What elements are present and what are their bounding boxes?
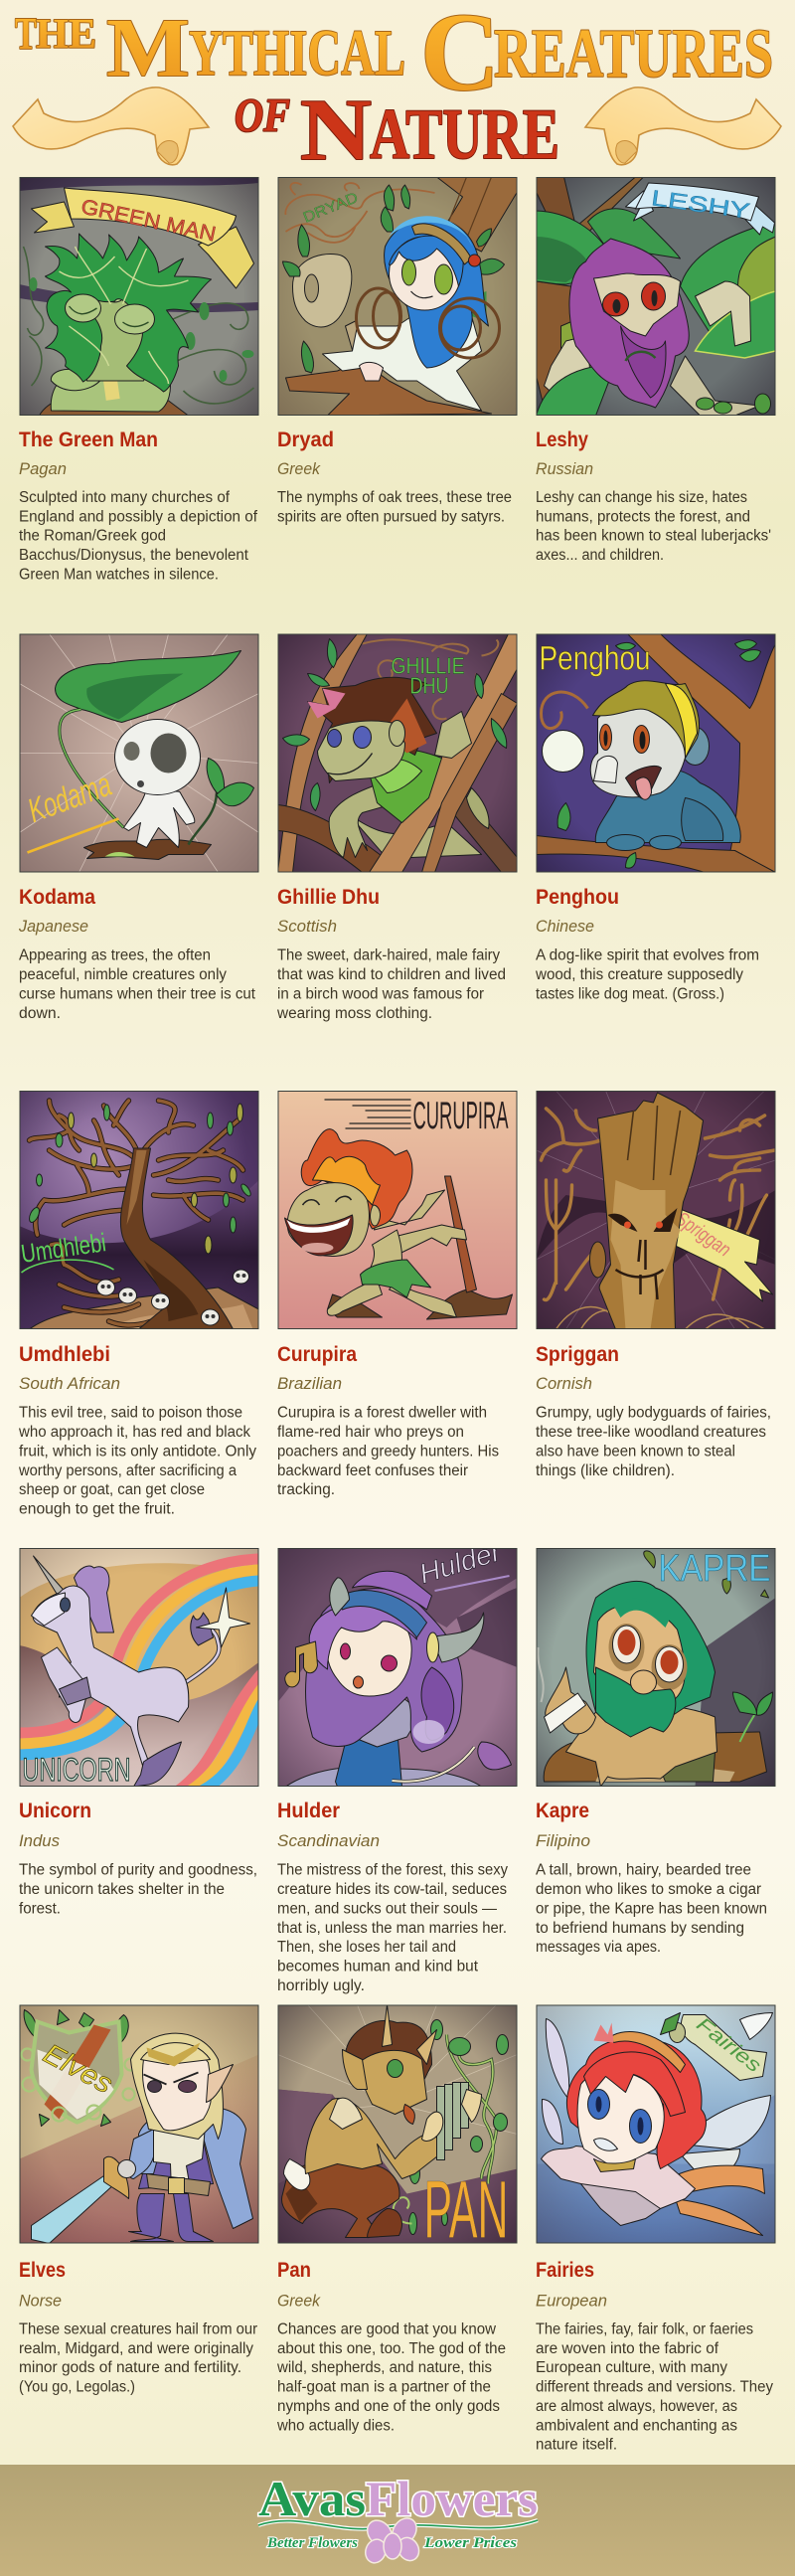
illustration: Hulder: Hulder: [415, 1535, 506, 1590]
description: are almost always, however, as: [536, 2398, 737, 2415]
description: who approach it, has red and black: [18, 1424, 250, 1441]
name: Unicorn: [19, 1800, 91, 1822]
card: Dryad: [277, 177, 517, 525]
illustration: Elves: [20, 2004, 258, 2243]
footer logo: Avas Flowers: Lower Prices: [423, 2535, 517, 2551]
origin: South African: [19, 1374, 120, 1393]
description: has been known to steal luberjacks': [536, 528, 771, 545]
description: backward feet confuses their: [277, 1462, 468, 1479]
description: flame-red hair who preys on: [277, 1424, 464, 1441]
description: England and possibly a depiction of: [19, 508, 258, 525]
origin: Cornish: [536, 1374, 592, 1393]
description: the Roman/Greek god: [19, 528, 166, 545]
origin: European: [536, 2292, 607, 2311]
illustration: Umdhlebi: Umdhlebi: [19, 1227, 107, 1269]
description: nature itself.: [536, 2437, 617, 2454]
description: worthy persons, after sacrificing a: [18, 1462, 237, 1479]
description: horribly ugly.: [277, 1977, 365, 1994]
footer logo: Avas Flowers: [258, 2471, 538, 2566]
footer logo: Avas Flowers: Better Flowers: [266, 2535, 358, 2551]
illustration: Elves: Elves: [39, 2037, 118, 2100]
footer band: [0, 2465, 795, 2576]
illustration: Unicorn: UNICORN: [22, 1752, 131, 1788]
illustration: Curupira: [278, 1091, 517, 1329]
description: who actually dies.: [276, 2417, 395, 2434]
title: of Nature: OF: [235, 89, 290, 142]
card: Unicorn: [19, 1548, 262, 1917]
illustration: Ghillie Dhu: GHILLIE: [392, 652, 465, 678]
description: spirits are often pursued by satyrs.: [277, 508, 505, 525]
name: Dryad: [277, 429, 334, 451]
description: things (like children).: [536, 1462, 675, 1479]
description: sheep or goat, can get close: [19, 1481, 205, 1498]
name: Ghillie Dhu: [277, 886, 380, 909]
description: wild, shepherds, and nature, this: [276, 2359, 492, 2376]
illustration: Green Man: GREEN MAN: [79, 195, 218, 247]
illustration: Unicorn: [20, 1548, 262, 1791]
origin: Norse: [19, 2292, 62, 2311]
title: The Mythical Creatures: T: [15, 8, 37, 59]
card: Umdhlebi: [18, 1091, 258, 1517]
description: the unicorn takes shelter in the: [19, 1881, 225, 1898]
name: Curupira: [277, 1343, 357, 1366]
description: minor gods of nature and fertility.: [19, 2359, 241, 2376]
card: Curupira: [277, 1091, 517, 1498]
card: Leshy: [536, 177, 775, 564]
description: axes... and children.: [536, 547, 664, 564]
description: [19, 2320, 257, 2396]
origin: Scottish: [277, 917, 337, 936]
description: Chances are good that you know: [277, 2320, 497, 2338]
description: are woven into the fabric of: [536, 2340, 719, 2357]
illustration: Spriggan: [537, 1091, 775, 1329]
description: Curupira is a forest dweller with: [277, 1405, 487, 1422]
illustration: Dryad: [278, 177, 517, 416]
name: Spriggan: [536, 1343, 619, 1366]
name: Umdhlebi: [19, 1343, 110, 1366]
description: ambivalent and enchanting as: [536, 2417, 737, 2434]
description: about this one, too. The god of the: [277, 2340, 506, 2357]
description: Then, she loses her tail and: [277, 1939, 456, 1956]
origin: Greek: [277, 459, 321, 478]
description: Green Man watches in silence.: [19, 566, 219, 583]
description: enough to get the fruit.: [19, 1501, 175, 1517]
name: Hulder: [277, 1800, 340, 1822]
left banner scroll: [13, 87, 209, 165]
description: to befriend humans by sending: [536, 1920, 744, 1937]
name: Kodama: [19, 886, 95, 909]
title: The Mythical Creatures: M: [106, 2, 190, 94]
illustration: Leshy: [537, 177, 775, 416]
illustration: Pan: [278, 2004, 517, 2255]
card: Elves: [19, 2004, 258, 2396]
description: The sweet, dark-haired, male fairy: [277, 947, 500, 964]
description: [276, 2320, 506, 2434]
name: Fairies: [536, 2259, 594, 2282]
origin: Greek: [277, 2292, 321, 2311]
name: Pan: [277, 2259, 311, 2282]
origin: Russian: [536, 459, 593, 478]
card: Penghou: [535, 634, 775, 1002]
illustration: Fairies: [537, 2004, 775, 2243]
illustration: Dryad: DRYAD: [301, 189, 361, 227]
description: creature hides its cow-tail, seduces: [277, 1881, 507, 1898]
illustration: Ghillie Dhu: DHU: [409, 672, 449, 698]
description: demon who likes to smoke a cigar: [536, 1881, 761, 1898]
description: This evil tree, said to poison those: [19, 1405, 242, 1422]
illustration: Kapre: KAPRE: [658, 1548, 771, 1590]
description: that is, unless the man marries her.: [277, 1920, 507, 1937]
description: [536, 2320, 773, 2454]
description: [535, 947, 759, 1002]
description: [536, 1862, 767, 1956]
title: The Mythical Creatures: HE: [36, 12, 96, 58]
illustration: Kapre: [537, 1548, 775, 1787]
illustration: Curupira: CURUPIRA: [413, 1095, 509, 1137]
description: A dog-like spirit that evolves from: [536, 947, 759, 964]
origin: Chinese: [536, 917, 594, 936]
footer logo: Avas Flowers: Flowers: [366, 2471, 538, 2526]
description: or pipe, the Kapre has been known: [536, 1900, 767, 1917]
origin: Pagan: [19, 459, 67, 478]
description: [18, 1405, 256, 1517]
description: fruit, which is its only antidote. Only: [19, 1443, 256, 1460]
card: The Green Man: [19, 177, 258, 583]
origin: Scandinavian: [277, 1831, 380, 1850]
illustration: Penghou: [537, 634, 775, 873]
illustration: Kodama: [20, 634, 258, 873]
description: [277, 1405, 499, 1498]
name: Elves: [19, 2259, 66, 2282]
description: poachers and greedy hunters. His: [277, 1443, 499, 1460]
description: [536, 489, 771, 564]
description: These sexual creatures hail from our: [19, 2320, 257, 2338]
description: peaceful, nimble creatures only: [19, 966, 227, 983]
title: of Nature: N: [300, 83, 372, 179]
illustration: Spriggan: Spriggan: [672, 1208, 734, 1261]
illustration: Kodama: Kodama: [23, 766, 116, 830]
card: Spriggan: [536, 1091, 775, 1479]
description: [19, 947, 256, 1022]
description: Leshy can change his size, hates: [536, 489, 747, 506]
card: Pan: [276, 2004, 517, 2434]
title: of Nature: [235, 83, 559, 179]
card: Kodama: [18, 634, 259, 1022]
right banner scroll: [585, 87, 781, 165]
title: The Mythical Creatures: YTHICAL: [189, 17, 405, 89]
description: [536, 1405, 771, 1479]
description: nymphs and one of the only gods: [277, 2398, 500, 2415]
origin: Brazilian: [277, 1374, 342, 1393]
origin: Indus: [19, 1831, 60, 1850]
description: The fairies, fay, fair folk, or faeries: [536, 2320, 753, 2338]
name: Penghou: [536, 886, 619, 909]
title: The Mythical Creatures: [15, 0, 773, 114]
description: The nymphs of oak trees, these tree: [277, 489, 512, 506]
description: tracking.: [277, 1481, 335, 1498]
description: tastes like dog meat. (Gross.): [536, 985, 724, 1002]
card: Ghillie Dhu: [276, 634, 517, 1022]
name: Leshy: [536, 429, 588, 451]
description: [19, 489, 258, 583]
description: [277, 489, 512, 525]
description: The mistress of the forest, this sexy: [277, 1862, 508, 1879]
description: Bacchus/Dionysus, the benevolent: [19, 547, 249, 564]
description: (You go, Legolas.): [19, 2379, 135, 2396]
illustration: Leshy: LESHY: [650, 185, 752, 224]
title: of Nature: ATURE: [370, 94, 559, 174]
description: [19, 1862, 257, 1917]
description: men, and sucks out their souls —: [277, 1900, 497, 1917]
card: Kapre: [536, 1548, 775, 1956]
description: down.: [19, 1005, 61, 1022]
footer logo: Avas Flowers: Avas: [258, 2471, 366, 2526]
illustration: Green Man: [20, 177, 258, 416]
description: forest.: [19, 1900, 61, 1917]
description: in a birch wood was famous for: [277, 985, 484, 1002]
description: The symbol of purity and goodness,: [19, 1862, 257, 1879]
illustration: Pan: PAN: [423, 2165, 509, 2255]
description: messages via apes.: [536, 1939, 661, 1956]
description: Grumpy, ugly bodyguards of fairies,: [536, 1405, 771, 1422]
description: curse humans when their tree is cut: [19, 985, 256, 1002]
description: wearing moss clothing.: [276, 1005, 432, 1022]
description: wood, this creature supposedly: [535, 966, 743, 983]
illustration: Penghou: Penghou: [539, 640, 650, 678]
description: European culture, with many: [536, 2359, 727, 2376]
name: The Green Man: [19, 429, 158, 451]
description: Appearing as trees, the often: [19, 947, 211, 964]
card: Hulder: [277, 1535, 517, 1994]
description: half-goat man is a partner of the: [277, 2379, 491, 2396]
description: also have been known to steal: [536, 1443, 735, 1460]
illustration: Hulder: [278, 1535, 517, 1787]
illustration: Ghillie Dhu: [278, 634, 517, 873]
illustration: Umdhlebi: [19, 1091, 258, 1329]
name: Kapre: [536, 1800, 589, 1822]
description: these tree-like woodland creatures: [536, 1424, 766, 1441]
origin: Japanese: [18, 917, 88, 936]
description: [277, 1862, 508, 1994]
description: A tall, brown, hairy, bearded tree: [536, 1862, 751, 1879]
description: different threads and versions. They: [536, 2379, 773, 2396]
description: becomes human and kind but: [277, 1959, 479, 1975]
description: that was kind to children and lived: [277, 966, 506, 983]
description: humans, protects the forest, and: [536, 508, 750, 525]
illustration: Fairies: Fairies: [692, 2013, 765, 2077]
origin: Filipino: [536, 1831, 590, 1850]
description: [276, 947, 506, 1022]
description: realm, Midgard, and were originally: [19, 2340, 253, 2357]
description: Sculpted into many churches of: [19, 489, 231, 506]
card: Fairies: [536, 2004, 775, 2454]
